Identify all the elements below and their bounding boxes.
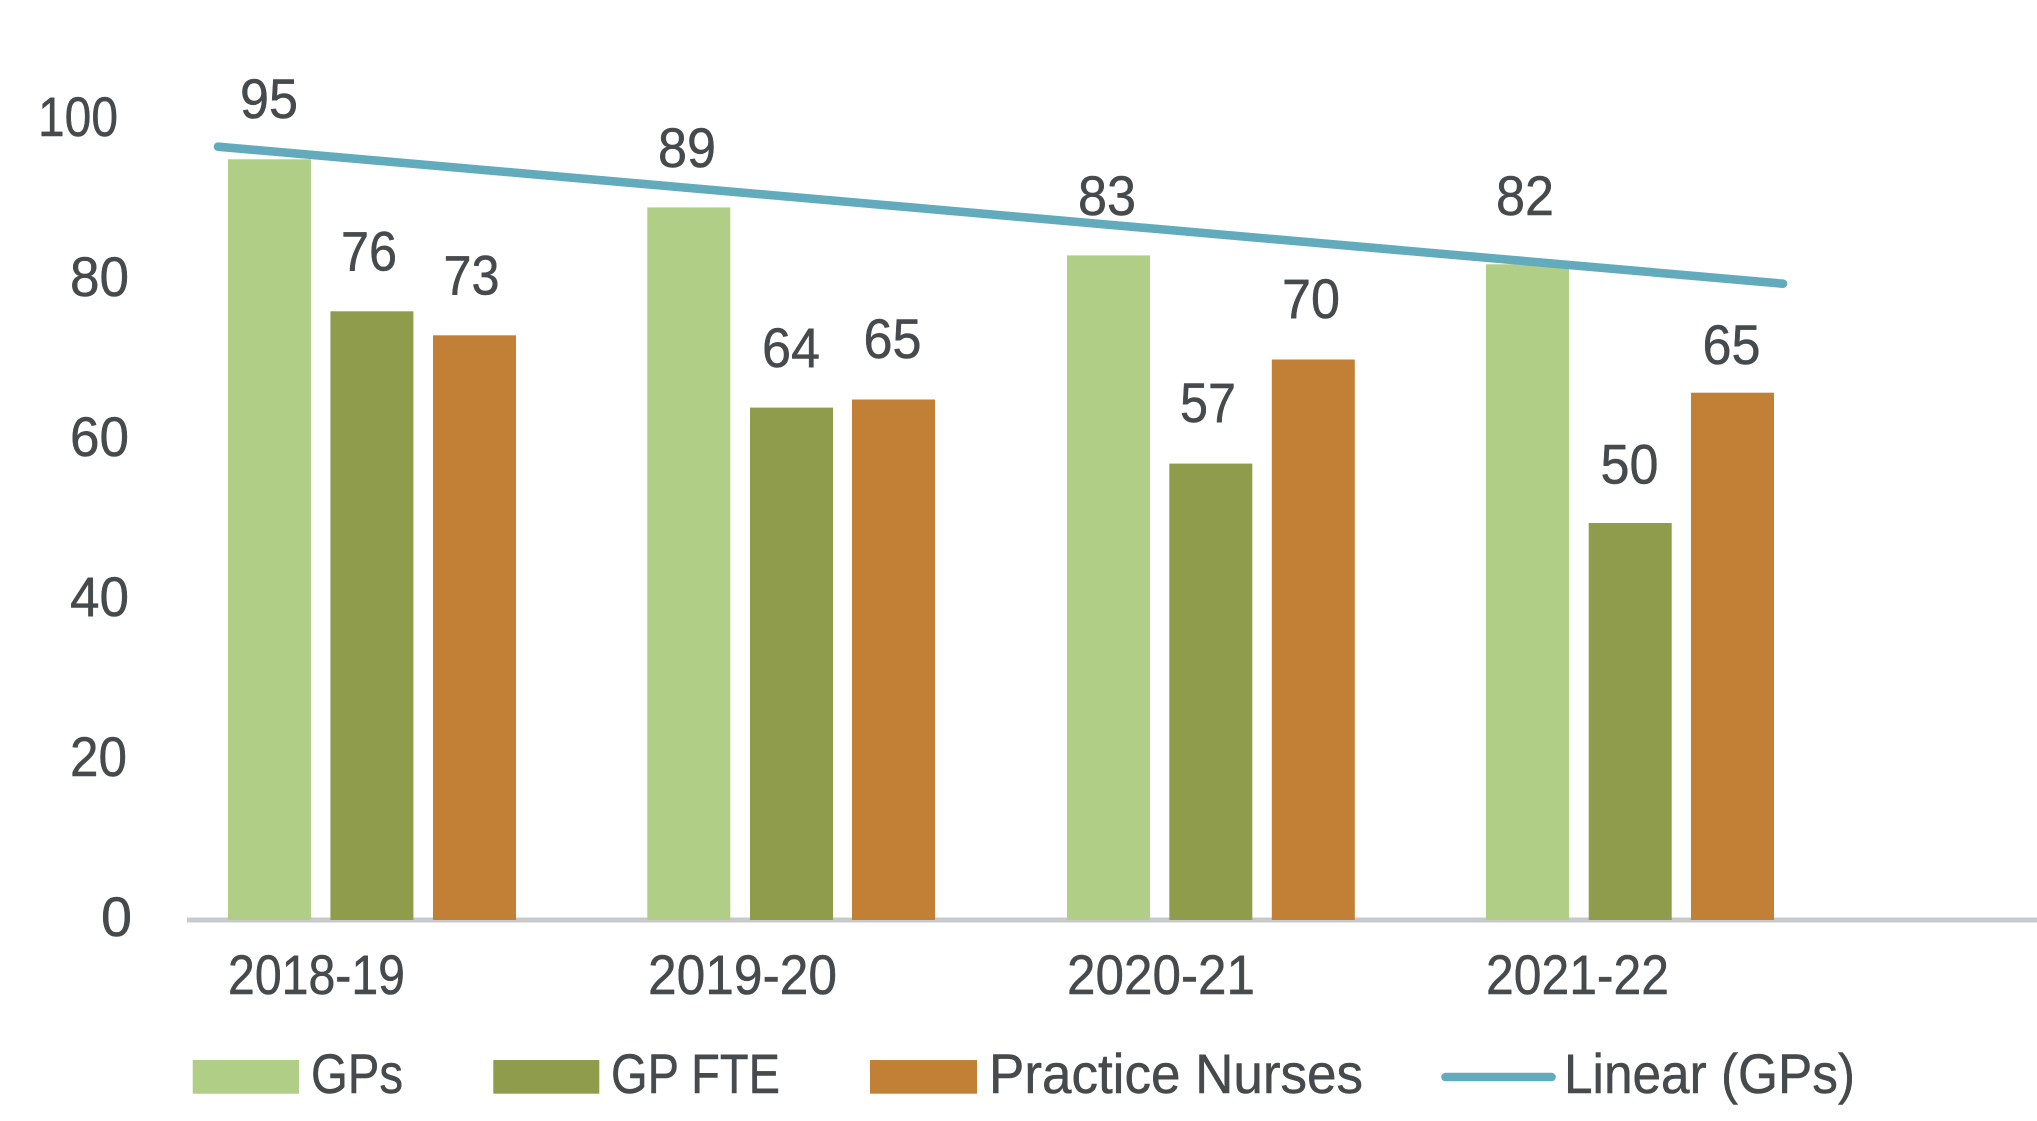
legend item: GP FTE: GP FTE xyxy=(611,1042,780,1105)
y axis labels: 80 xyxy=(70,245,129,308)
y axis labels: 100 xyxy=(38,85,118,148)
data labels: 73 xyxy=(444,244,500,306)
data labels: 65 xyxy=(1702,313,1760,376)
data labels: 83 xyxy=(1078,164,1136,227)
x axis labels: 2020-21 xyxy=(1067,943,1255,1006)
data labels: 57 xyxy=(1180,371,1236,434)
data labels: 76 xyxy=(341,220,397,282)
y axis labels xyxy=(38,85,132,948)
legend item: GPs xyxy=(193,1042,403,1105)
data labels xyxy=(240,67,1760,496)
bars: 2020-21 xyxy=(1067,255,1355,920)
y axis labels: 60 xyxy=(70,405,129,468)
data labels: 95 xyxy=(240,67,298,130)
x axis labels: 2019-20 xyxy=(648,943,837,1006)
x axis labels xyxy=(228,943,1669,1006)
y axis labels: 20 xyxy=(70,725,127,788)
bars: 2019-20 xyxy=(647,207,935,920)
data labels: 70 xyxy=(1282,267,1340,330)
trend line: Linear (GPs) xyxy=(218,147,1783,284)
data labels: 64 xyxy=(762,316,820,379)
legend item: GP FTE xyxy=(493,1042,780,1105)
legend xyxy=(193,1042,1855,1105)
x axis labels: 2021-22 xyxy=(1486,943,1669,1006)
bars: 2021-22 xyxy=(1486,264,1774,920)
y axis labels: 0 xyxy=(101,885,132,948)
x axis line xyxy=(187,918,2037,922)
legend item: Practice Nurses: Practice Nurses xyxy=(989,1042,1363,1105)
data labels: 50 xyxy=(1600,432,1658,496)
legend item: Linear (GPs): Linear (GPs) xyxy=(1564,1042,1855,1105)
y axis labels: 40 xyxy=(70,565,129,628)
legend item: GPs: GPs xyxy=(311,1042,403,1105)
data labels: 89 xyxy=(658,116,716,179)
x axis labels: 2018-19 xyxy=(228,943,405,1006)
data labels: 65 xyxy=(864,307,922,370)
data labels: 82 xyxy=(1496,164,1554,227)
bars: 2018-19 xyxy=(228,159,516,920)
